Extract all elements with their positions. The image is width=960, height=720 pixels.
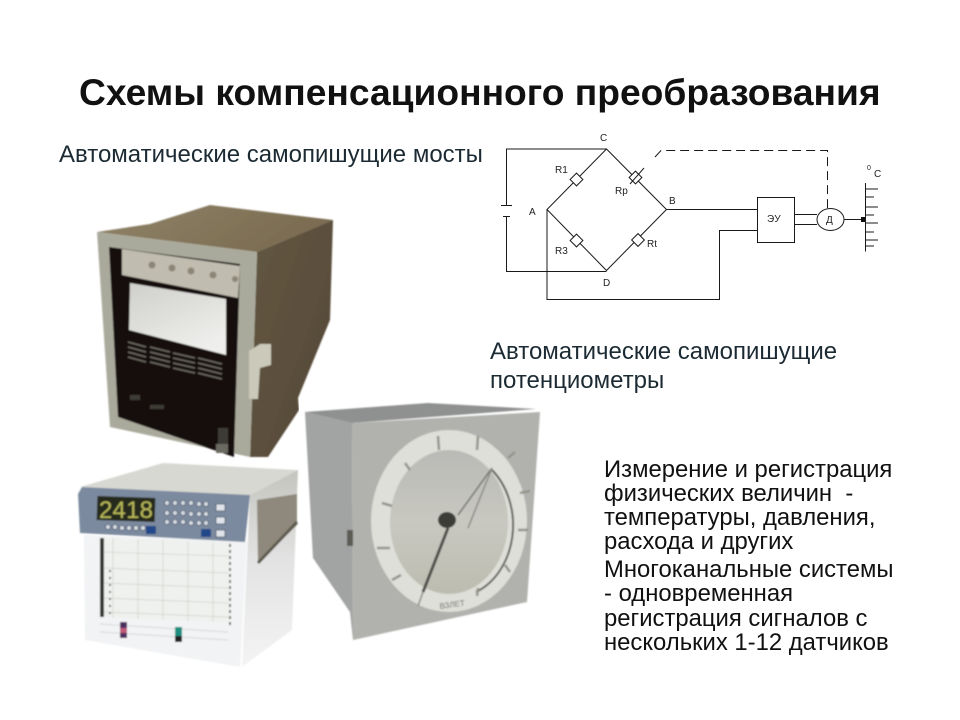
title: Схемы компенсационного преобразования [79,71,881,113]
resistor Rp [629,168,644,184]
dark interior [109,247,240,457]
lower panel details [130,395,228,453]
text block: description: - одновременная [604,580,793,607]
gauge case top [305,403,536,423]
front frame [97,232,257,457]
square keys [146,526,211,537]
recorder case top [80,463,298,495]
display readout: 2418 [99,497,153,524]
paper chart [129,283,226,355]
scale knobs [148,262,238,282]
text block: description [604,456,894,656]
diagram labels: A [529,207,536,218]
gauge latch [347,530,353,546]
diagram labels: Д [826,215,833,226]
diagram labels: C [600,133,607,144]
diagram labels: Rt [647,239,657,250]
chart grid [100,538,228,640]
white cutout behind gauge [299,398,319,414]
heading: automatic recording potentiometers: потенциометры [490,367,664,394]
gauge hub [438,512,456,528]
text block: description: нескольких 1-12 датчиков [604,629,889,656]
temperature scale [866,183,878,252]
diagram labels: R3 [555,246,568,257]
heading: automatic recording bridges: Автоматические самопишущие мосты [59,141,483,168]
motor [817,208,844,230]
diagram labels: B [669,196,676,207]
battery and supply wires [501,149,606,272]
diagram labels: ЭУ [767,214,781,225]
diagram labels: C [874,169,881,180]
colour pens [120,622,127,638]
text block: description: расхода и других [604,528,793,555]
motor shaft [844,218,862,220]
amplifier to motor wires [795,214,817,224]
heading: automatic recording potentiometers [490,338,837,394]
photo: digital recorder [78,463,298,667]
feedback wire from A to amplifier [547,210,757,300]
photo: round chart potentiometer [305,403,540,640]
recorder front body [84,535,247,667]
vent slats [128,342,222,379]
diagram labels: Rp [615,186,628,197]
case top [97,205,333,252]
chart perforation rails [100,538,104,617]
diagram labels: D [603,278,610,289]
text block: description: Многоканальные системы [604,556,894,583]
text block: description: Измерение и регистрация [604,456,892,483]
case side [250,220,333,457]
text block: description: температуры, давления, [604,504,875,531]
resistor R1 [570,173,583,186]
digital display [97,496,155,522]
recorder side [242,470,298,667]
door handle [249,344,271,399]
gauge case side [305,412,353,640]
signal wire from B to amplifier [666,208,757,210]
gauge dial ring [371,430,527,612]
circuit diagram [501,149,878,300]
pointer marker [861,217,865,222]
side mechanism [257,494,297,563]
amplifier box [758,198,794,242]
gauge maker mark: ВЗЛЕТ [439,599,465,611]
diagram labels [529,133,881,289]
gauge front [352,412,540,640]
scale strip [122,249,240,298]
resistor Rt [632,234,644,246]
gauge dial centre [390,450,508,594]
servo drive dashed link [655,150,828,208]
diagram labels: R1 [555,165,568,176]
text block: description: физических величин - [604,480,853,507]
photo: bridge recorder [97,205,333,457]
control panel [78,487,250,542]
diagram labels: 0 [867,165,871,172]
bridge diamond wiring [547,149,666,270]
chart paper [100,538,229,622]
panel buttons [106,500,208,530]
text block: description: регистрация сигналов с [604,605,868,632]
heading: automatic recording potentiometers: Автоматические самопишущие [490,338,837,365]
resistor R3 [570,234,583,247]
gauge ticks [377,436,530,596]
gauge hands [418,468,492,606]
